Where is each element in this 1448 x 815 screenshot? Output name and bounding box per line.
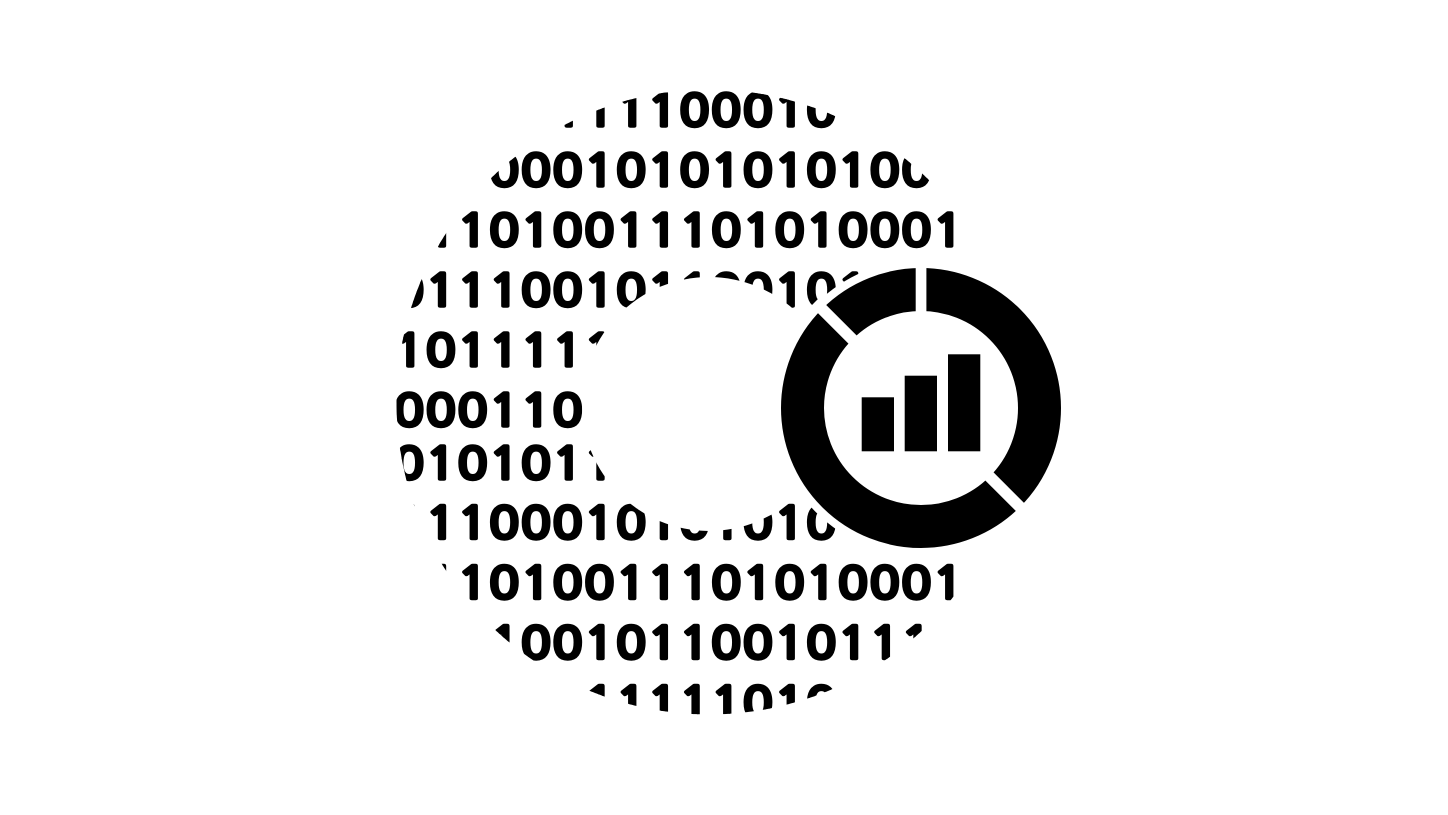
binary row 4: 011100101100101 bbox=[393, 270, 869, 314]
binary row 8: 11100010101010 bbox=[393, 502, 837, 546]
binary row 7: 0101011 bbox=[393, 443, 615, 487]
donut ring bbox=[802, 290, 1040, 526]
bar chart icon bbox=[862, 354, 980, 451]
donut gap: lower right bbox=[984, 471, 1027, 514]
binary row 5: 1011111 bbox=[393, 330, 615, 374]
bar 2 bbox=[905, 376, 937, 451]
bar 3 bbox=[948, 354, 980, 451]
white halo around the donut bbox=[773, 260, 1069, 556]
binary row 2: 00010101010100 bbox=[488, 150, 932, 194]
donut gap: upper left bbox=[815, 302, 858, 345]
binary row 1: 111100010 bbox=[552, 90, 837, 134]
central hole in the disc bbox=[582, 277, 836, 531]
bar 1 bbox=[862, 397, 894, 451]
binary digit disc bbox=[393, 90, 964, 726]
binary row 3: 11010011101010001 bbox=[425, 210, 964, 254]
binary row 9: 11010011101010001 bbox=[425, 562, 964, 606]
donut chart icon bbox=[802, 260, 1040, 526]
binary row 6: 000110 bbox=[393, 390, 583, 434]
binary row 11: 111111010 bbox=[552, 682, 837, 726]
binary row 10: 10010110010111 bbox=[488, 622, 932, 666]
donut gap: top bbox=[916, 260, 926, 320]
